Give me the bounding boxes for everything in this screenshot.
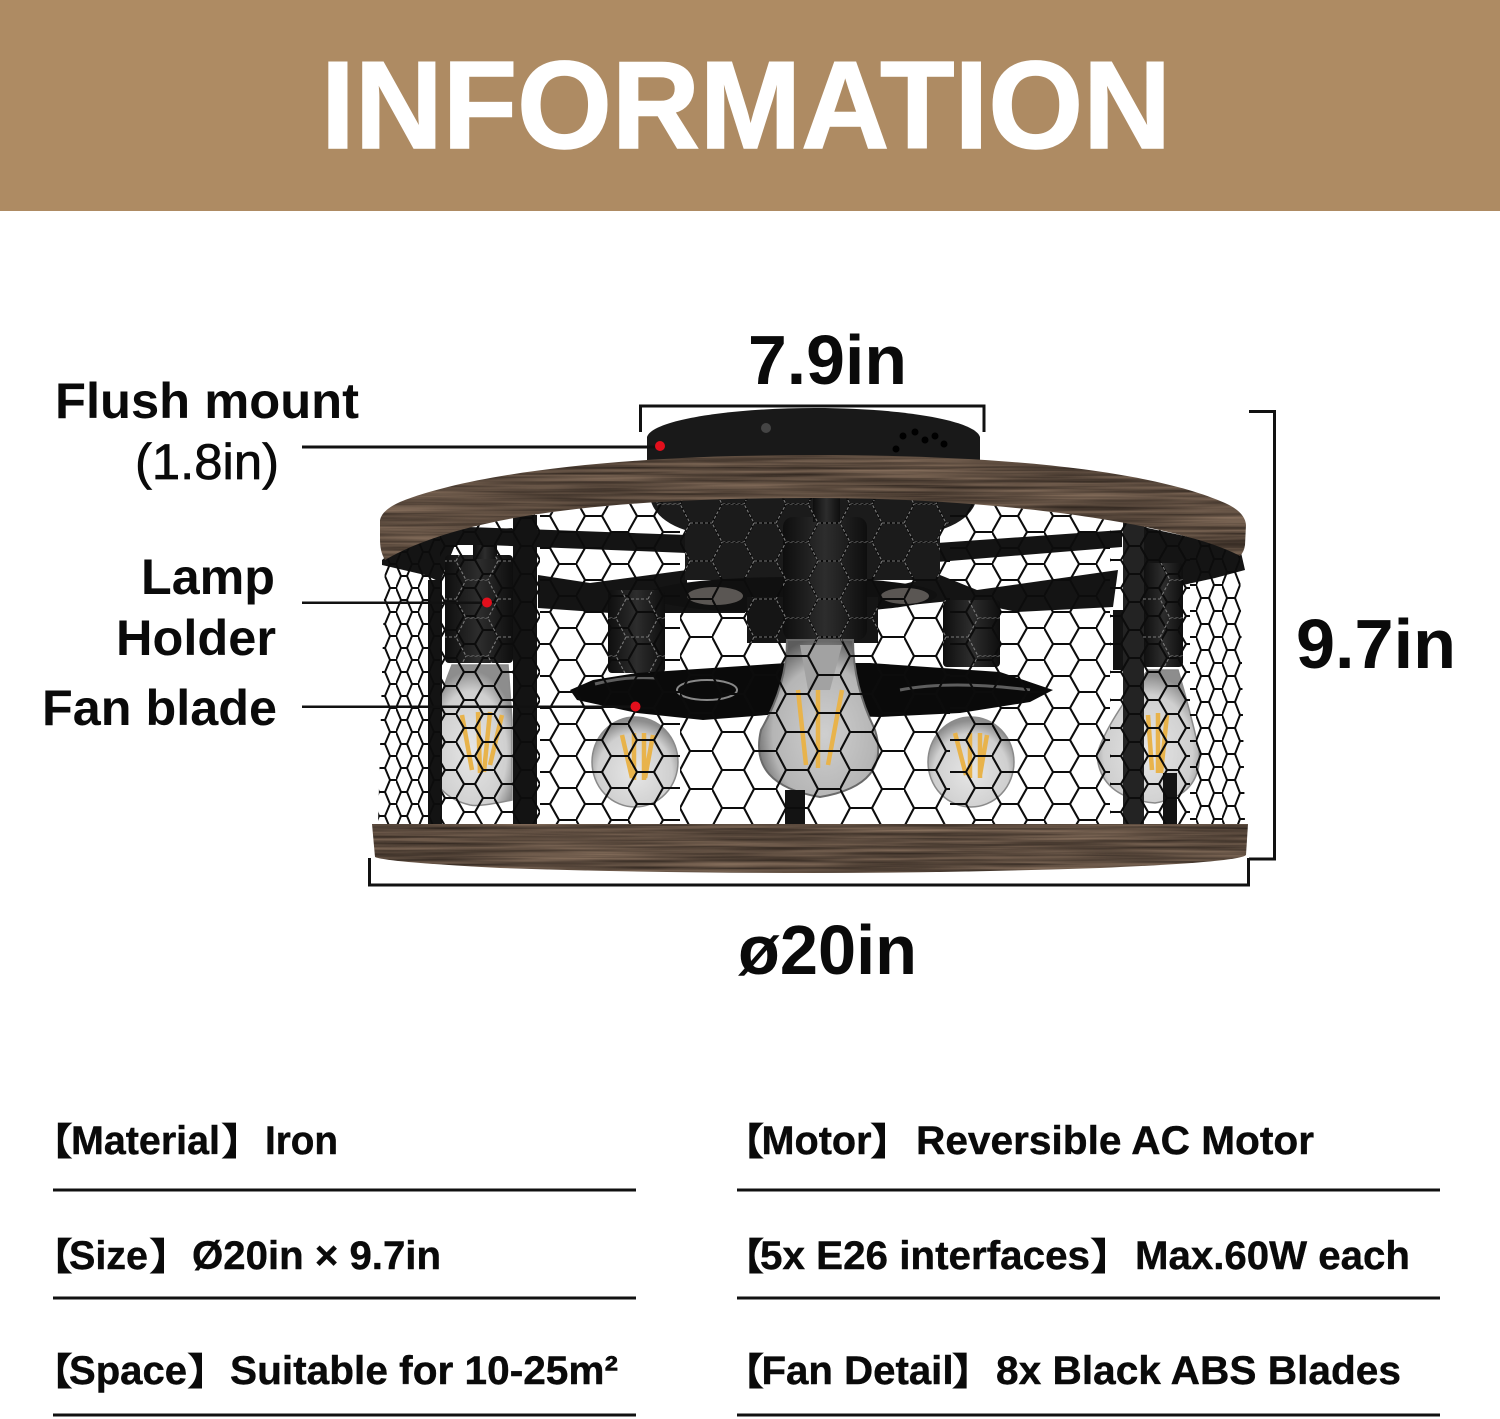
spec: interfaces: 】 [1089, 1226, 1135, 1281]
spec: fan detail: 8x Black ABS Blades [996, 1349, 1401, 1393]
spec: size: Size [69, 1234, 148, 1278]
rear filaments [462, 712, 1167, 780]
header band [0, 0, 1500, 211]
top wood ring [380, 455, 1246, 560]
label: flush mount [55, 373, 665, 490]
spec: fan detail: 】 [951, 1341, 997, 1396]
dimension: height: 9.7in [1296, 605, 1456, 683]
dimension: mount width: 7.9in [748, 321, 907, 399]
label: flush mount: (1.8in) [135, 434, 279, 490]
spec: fan detail [719, 1341, 1440, 1416]
spec: interfaces: 5x E26 interfaces [760, 1234, 1090, 1278]
label: lamp holder: Holder [116, 610, 276, 666]
spec: material [28, 1111, 636, 1192]
dimension: mount width [640, 321, 984, 432]
dimension: diameter [370, 858, 1248, 989]
spec: space: 【 [28, 1341, 74, 1396]
spec: fan detail: Fan Detail [762, 1349, 954, 1393]
label: flush mount: Flush mount [55, 373, 359, 429]
spec: material: Material [71, 1119, 220, 1163]
spec: interfaces: Max.60W each [1135, 1234, 1410, 1278]
spec: material: 】 [220, 1111, 266, 1166]
spec: motor: Reversible AC Motor [916, 1119, 1314, 1163]
spec: space: Suitable for 10-25m² [230, 1349, 618, 1393]
spec: motor: 】 [869, 1111, 915, 1166]
spec: material: Iron [265, 1119, 338, 1163]
label: lamp holder [116, 549, 492, 666]
spec: fan detail: 【 [719, 1341, 765, 1396]
chicken wire mesh [378, 498, 1246, 826]
fan blades [570, 663, 1053, 720]
dimension: height [1249, 412, 1456, 859]
inner frame arms [382, 525, 1245, 613]
spec: size: 】 [148, 1226, 194, 1281]
spec: size: Ø20in × 9.7in [192, 1234, 441, 1278]
spec: interfaces [719, 1226, 1440, 1300]
center bulb [759, 640, 878, 797]
spec: space: Space [69, 1349, 187, 1393]
lamp holders [445, 498, 1183, 673]
rear bulbs [430, 665, 1199, 807]
label: fan blade [42, 680, 640, 736]
spec: interfaces: 【 [719, 1226, 765, 1281]
hub disc [647, 577, 937, 613]
label: lamp holder: Lamp [141, 549, 275, 605]
spec: material: 【 [28, 1111, 74, 1166]
spec: space: 】 [186, 1341, 232, 1396]
mesh highlights on dark metal [440, 498, 1200, 678]
spec: space [28, 1341, 636, 1416]
spec: motor: Motor [762, 1119, 872, 1163]
central motor hub [647, 498, 977, 613]
bottom wood ring [372, 824, 1248, 873]
vertical posts [428, 515, 1177, 825]
ceiling mount [647, 408, 980, 462]
spec: motor: 【 [719, 1111, 765, 1166]
label: fan blade: Fan blade [42, 680, 277, 736]
product illustration: ceiling fan [372, 408, 1248, 873]
spec: size: 【 [28, 1226, 74, 1281]
dimension: diameter: ø20in [738, 911, 917, 989]
title: INFORMATION [321, 37, 1171, 175]
spec: size [28, 1226, 636, 1300]
spec: motor [719, 1111, 1440, 1192]
